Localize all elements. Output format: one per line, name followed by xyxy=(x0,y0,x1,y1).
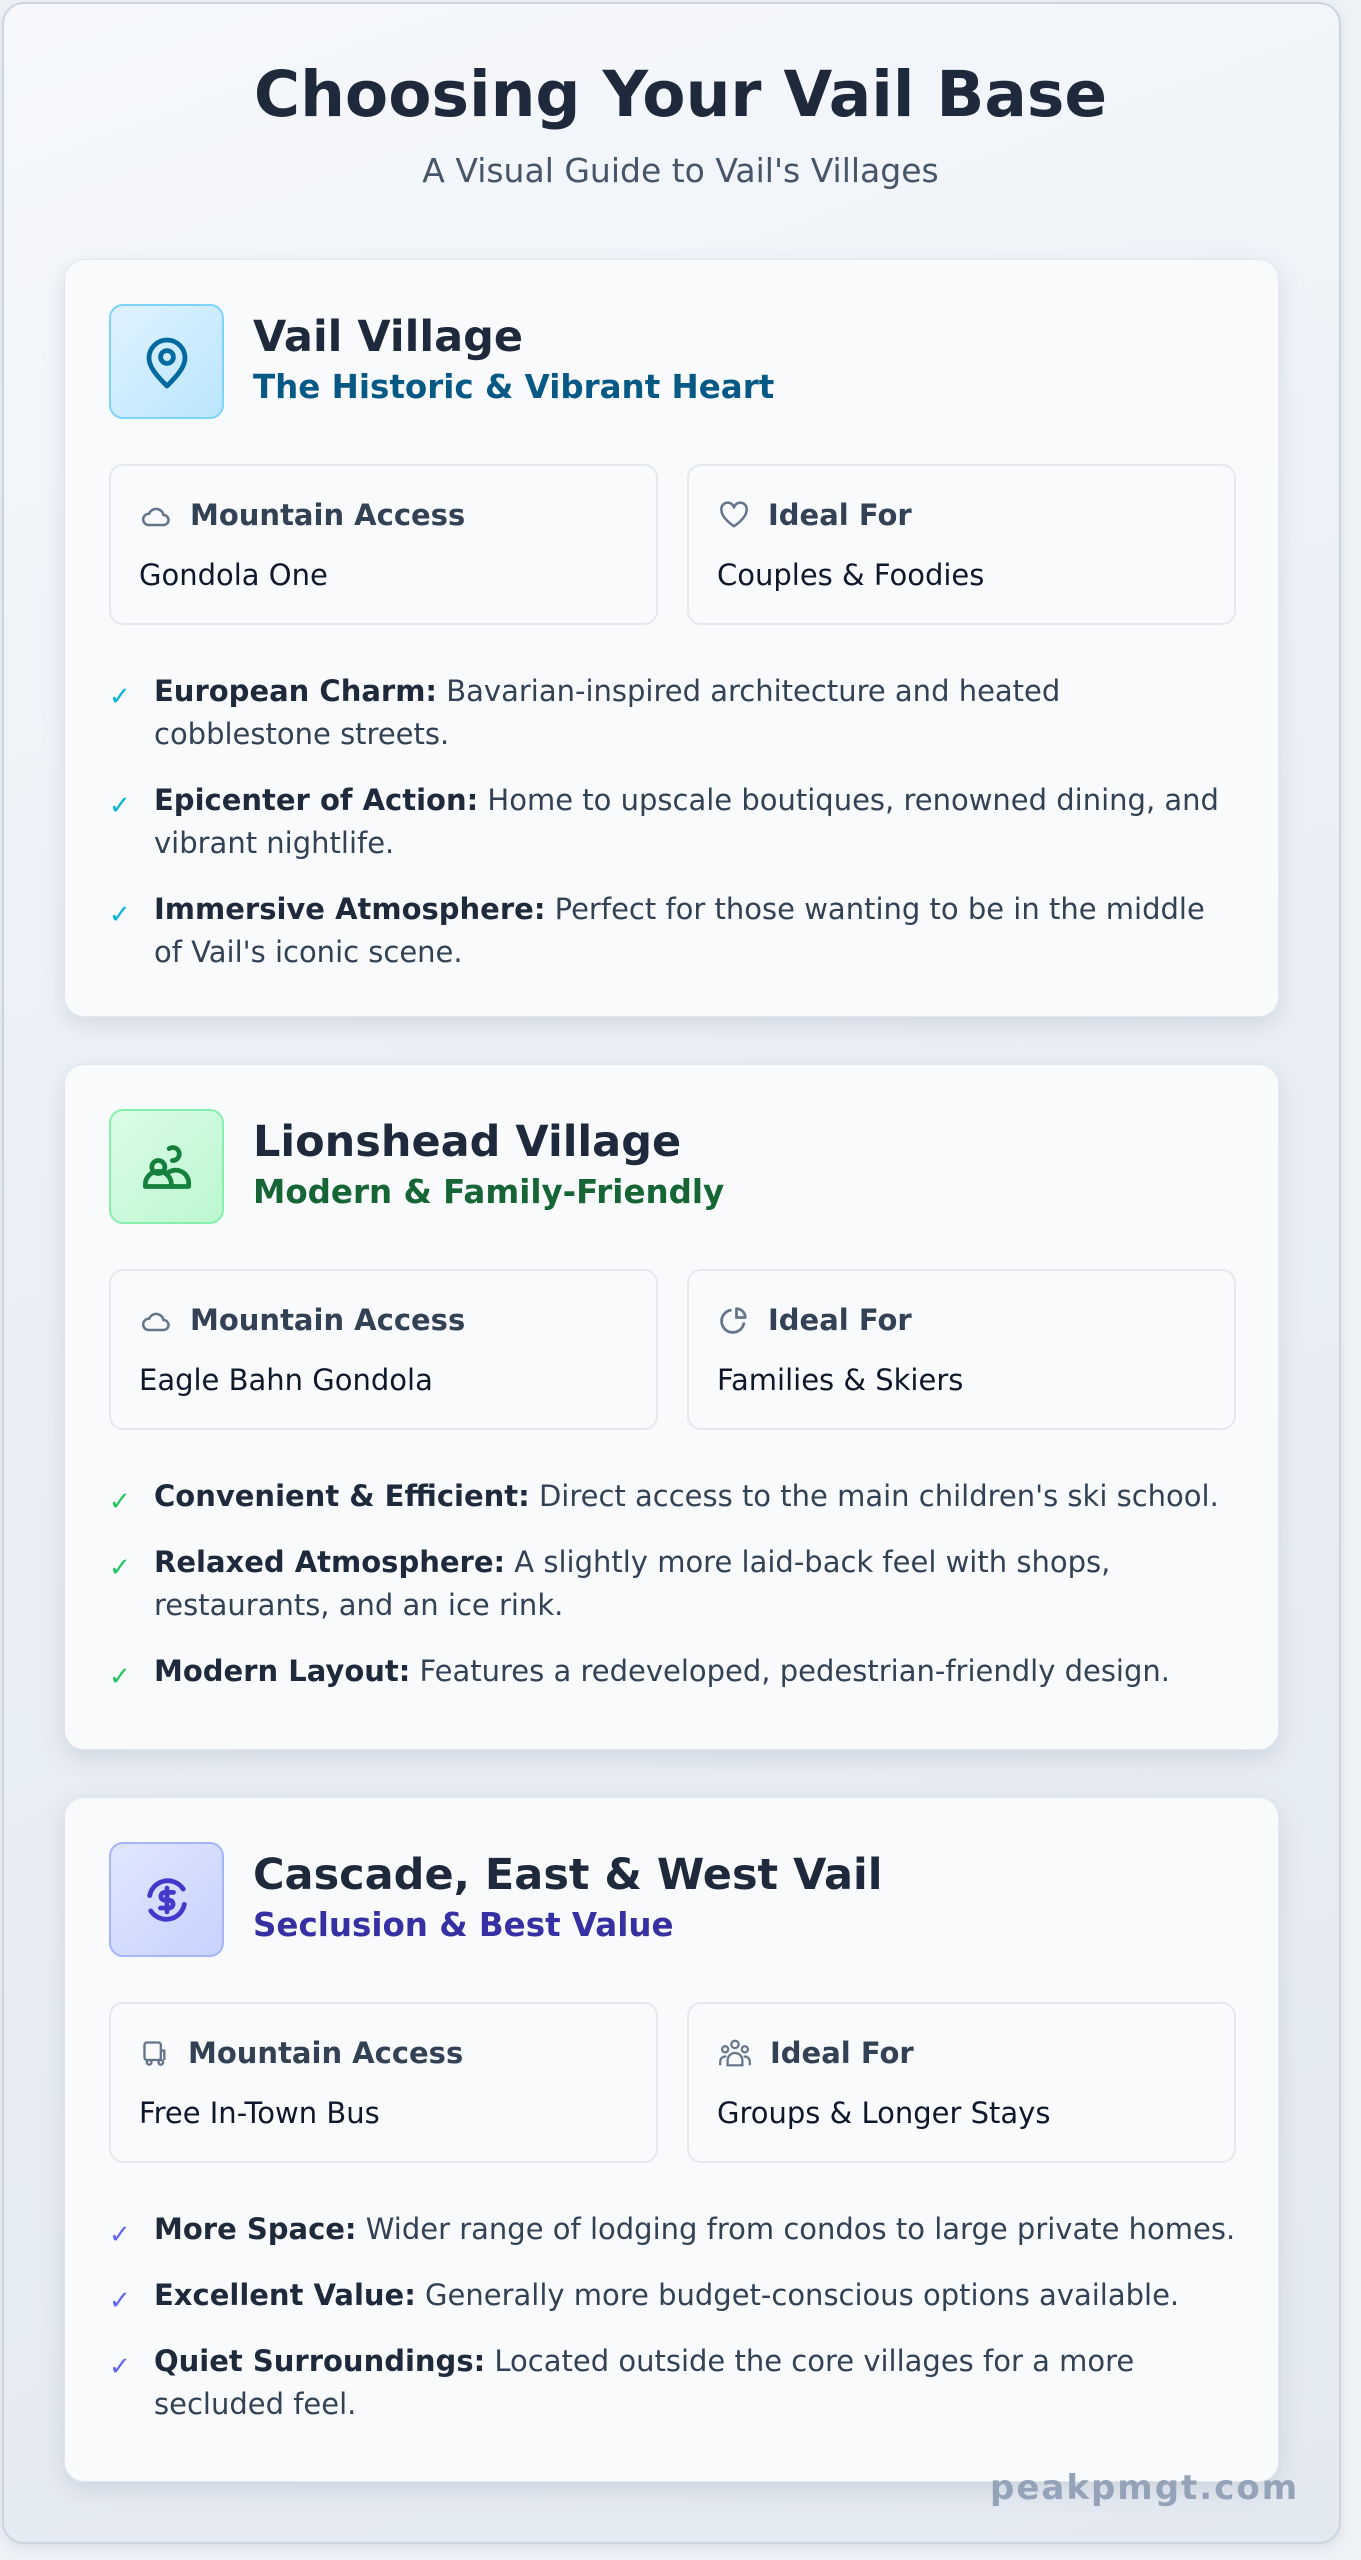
feature list: ✓ xyxy=(109,2220,131,2250)
feature list: Relaxed Atmosphere: A slightly more laid-back feel with shops, restaurants, and an ice rink. xyxy=(154,1545,1110,1622)
feature list: Epicenter of Action: Home to upscale boutiques, renowned dining, and vibrant nightlife. xyxy=(154,783,1219,860)
feature list xyxy=(109,2212,1235,2421)
feature list: ✓ xyxy=(109,2286,131,2316)
feature list: European Charm: Bavarian-inspired architecture and heated cobblestone streets. xyxy=(154,674,1060,751)
heading: Vail Village xyxy=(253,312,523,362)
icon: map pin xyxy=(109,304,224,419)
info: mountain access: Free In-Town Bus xyxy=(139,2096,380,2130)
info: mountain access: Eagle Bahn Gondola xyxy=(139,1363,433,1397)
info: ideal for: Ideal For xyxy=(770,2036,914,2070)
panel: Lionshead Village xyxy=(64,1064,1279,1750)
panel: Vail Village xyxy=(64,259,1279,1017)
info: ideal for: Ideal For xyxy=(768,498,912,532)
info: ideal for: Groups & Longer Stays xyxy=(717,2096,1050,2130)
info: mountain access xyxy=(109,1269,658,1430)
info: ideal for: Families & Skiers xyxy=(717,1363,963,1397)
feature list xyxy=(109,1479,1219,1692)
info: mountain access: Mountain Access xyxy=(190,1303,465,1337)
panel: Cascade, East & West Vail xyxy=(64,1797,1279,2482)
feature list: Convenient & Efficient: Direct access to the main children's ski school. xyxy=(154,1479,1219,1513)
feature list: More Space: Wider range of lodging from condos to large private homes. xyxy=(154,2212,1235,2246)
info: mountain access: Gondola One xyxy=(139,558,328,592)
feature list: ✓ xyxy=(109,1662,131,1692)
info: ideal for xyxy=(687,464,1236,625)
feature list: ✓ xyxy=(109,1487,131,1517)
heading: Cascade, East & West Vail xyxy=(253,1850,883,1900)
tagline: The Historic & Vibrant Heart xyxy=(253,368,774,406)
subtitle: A Visual Guide to Vail's Villages xyxy=(422,151,939,190)
watermark: peakpmgt.com xyxy=(990,2468,1299,2508)
icon: family xyxy=(109,1109,224,1224)
info: ideal for: Ideal For xyxy=(768,1303,912,1337)
feature list: ✓ xyxy=(109,2352,131,2382)
feature list: ✓ xyxy=(109,1553,131,1583)
info: ideal for xyxy=(687,2002,1236,2163)
feature list: ✓ xyxy=(109,682,131,712)
feature list xyxy=(109,674,1219,969)
tagline: Modern & Family-Friendly xyxy=(253,1173,724,1211)
icon: dollar cycle xyxy=(109,1842,224,1957)
info: mountain access xyxy=(109,2002,658,2163)
feature list: ✓ xyxy=(109,791,131,821)
info: mountain access: Mountain Access xyxy=(190,498,465,532)
feature list: Quiet Surroundings: Located outside the core villages for a more secluded feel. xyxy=(154,2344,1134,2421)
feature list: Modern Layout: Features a redeveloped, pedestrian-friendly design. xyxy=(154,1654,1170,1688)
feature list: ✓ xyxy=(109,900,131,930)
info: ideal for: Couples & Foodies xyxy=(717,558,984,592)
info: mountain access: Mountain Access xyxy=(188,2036,463,2070)
feature list: Excellent Value: Generally more budget-conscious options available. xyxy=(154,2278,1179,2312)
heading: Lionshead Village xyxy=(253,1117,681,1167)
info: ideal for xyxy=(687,1269,1236,1430)
feature list: Immersive Atmosphere: Perfect for those wanting to be in the middle of Vail's iconic scene. xyxy=(154,892,1205,969)
tagline: Seclusion & Best Value xyxy=(253,1906,674,1944)
info: mountain access xyxy=(109,464,658,625)
title: Choosing Your Vail Base xyxy=(254,58,1107,131)
